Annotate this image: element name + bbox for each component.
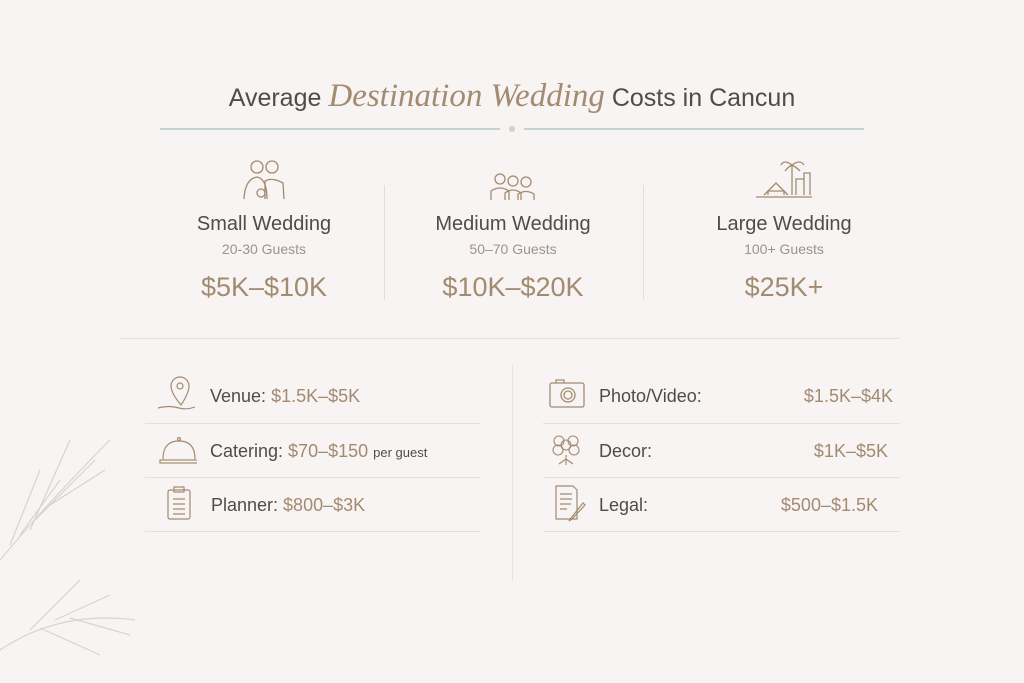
item: decor: $1K–$5K [814, 441, 888, 461]
panel: large wedding: 100+ Guests [744, 241, 824, 257]
panel: medium wedding: Medium Wedding [435, 213, 591, 235]
panel: large wedding: $25K+ [745, 272, 823, 302]
item: legal: $500–$1.5K [781, 495, 878, 515]
list: right costs [543, 379, 900, 532]
item: photo/video [543, 369, 900, 424]
panel: small wedding: 20-30 Guests [222, 241, 306, 257]
panel: large wedding: Large Wedding [716, 213, 852, 235]
item: planner [145, 477, 480, 532]
panel: medium wedding: $10K–$20K [442, 272, 584, 302]
icon: resort [756, 161, 812, 198]
panel: small wedding: Small Wedding [197, 213, 331, 235]
item: photo/video: Photo/Video: [599, 386, 702, 406]
icon: group [490, 173, 535, 200]
title divider [160, 126, 864, 132]
item: legal [543, 477, 900, 532]
item: decor: Decor: [599, 441, 652, 461]
item: decor [543, 423, 900, 478]
item: catering [145, 423, 480, 478]
item: photo/video: $1.5K–$4K [804, 386, 893, 406]
panel: small wedding: $5K–$10K [201, 272, 327, 302]
panel: large wedding [716, 161, 852, 302]
item: venue: Venue: $1.5K–$5K [210, 386, 360, 406]
panel: medium wedding: 50–70 Guests [469, 241, 557, 257]
panel: small wedding [197, 160, 331, 302]
column dividers [384, 185, 385, 300]
item: catering: Catering: $70–$150 per guest [210, 441, 427, 461]
icon: couple [243, 160, 285, 199]
item: venue [145, 369, 480, 424]
panel: medium wedding [435, 173, 591, 302]
list: left costs [145, 376, 480, 532]
item: legal: Legal: [599, 495, 648, 515]
item: planner: Planner: $800–$3K [211, 495, 365, 515]
decorative leaves [0, 440, 135, 656]
title: Average Destination Wedding Costs in Cancun [229, 78, 795, 114]
